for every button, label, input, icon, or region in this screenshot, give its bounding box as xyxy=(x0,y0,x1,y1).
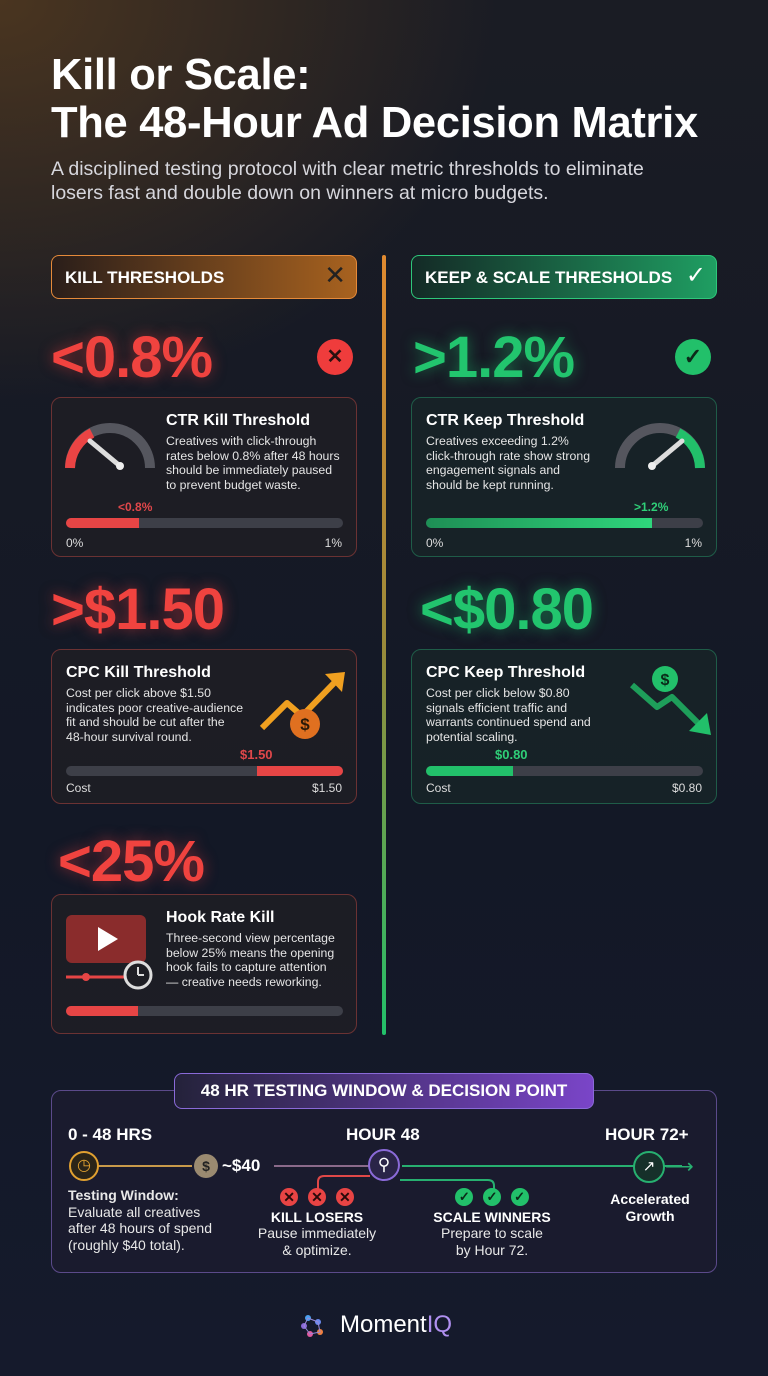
card: CTR kill: 0% xyxy=(66,536,83,550)
timeline title pill xyxy=(174,1073,594,1109)
card: CPC kill: indicates poor creative-audience xyxy=(66,700,243,714)
dollar marker xyxy=(194,1154,218,1178)
icon: check: ✓ xyxy=(686,262,706,289)
icon: trend up with dollar: $ xyxy=(300,715,310,734)
card: CTR keep: CTR Keep Threshold xyxy=(426,412,584,429)
card: CTR keep: Creatives exceeding 1.2% xyxy=(426,434,569,448)
kill losers: ✕ xyxy=(311,1189,323,1205)
keep header: KEEP & SCALE THRESHOLDS xyxy=(425,268,672,287)
icon: clock xyxy=(69,1151,99,1181)
divider xyxy=(382,255,386,1035)
card: CPC keep xyxy=(411,649,717,804)
kill losers: ✕ xyxy=(339,1189,351,1205)
big: <$0.80: <$0.80 xyxy=(420,577,593,642)
subtitle xyxy=(51,158,644,204)
panel: timeline: Accelerated xyxy=(610,1191,690,1207)
subtitle: losers fast and double down on winners at micro budgets. xyxy=(51,182,549,204)
icon: video player xyxy=(66,915,152,990)
card: CTR keep: click-through rate show strong xyxy=(426,448,590,462)
col 2: HOUR 48 xyxy=(346,1125,420,1144)
kill losers: & optimize. xyxy=(282,1242,352,1258)
card: CPC kill: Cost per click above $1.50 xyxy=(66,686,211,700)
icon: green check circle xyxy=(675,339,711,375)
icon: red x circle xyxy=(317,339,353,375)
panel: timeline: Evaluate all creatives xyxy=(68,1204,200,1220)
logo: MomentIQ xyxy=(340,1311,452,1338)
gauge xyxy=(615,423,705,470)
kill header: KILL THRESHOLDS xyxy=(65,268,224,287)
card: CPC kill: 48-hour survival round. xyxy=(66,730,192,744)
icon: clock: ◷ xyxy=(77,1157,91,1174)
card: CPC keep: Cost xyxy=(426,781,451,795)
kill losers: KILL LOSERS xyxy=(271,1209,363,1225)
big: >$1.50: >$1.50 xyxy=(51,577,224,642)
card: CPC keep: signals efficient traffic and xyxy=(426,700,567,714)
timeline title pill: 48 HR TESTING WINDOW & DECISION POINT xyxy=(201,1081,567,1100)
panel: timeline: Testing Window: xyxy=(68,1187,179,1203)
icon: trend down with dollar: $ xyxy=(661,672,670,689)
card: CTR kill: to prevent budget waste. xyxy=(166,478,301,492)
icon: trend up with dollar xyxy=(260,672,345,739)
kill header xyxy=(51,255,357,299)
subtitle: A disciplined testing protocol with clear metric thresholds to eliminate xyxy=(51,158,644,180)
card: CTR keep: engagement signals and xyxy=(426,463,560,477)
card: hook rate: — creative needs reworking. xyxy=(166,974,322,988)
icon: red x circle: ✕ xyxy=(327,346,343,368)
card: CPC kill: CPC Kill Threshold xyxy=(66,664,211,681)
big: <0.8%: <0.8% xyxy=(51,325,212,390)
card: CPC kill: fit and should be cut after the xyxy=(66,715,225,729)
icon: green check circle: ✓ xyxy=(684,344,702,369)
gauge xyxy=(65,423,155,470)
card: CTR kill: <0.8% xyxy=(118,500,152,514)
panel: timeline: after 48 hours of spend xyxy=(68,1220,212,1236)
card: CPC kill: $1.50 xyxy=(312,781,342,795)
icon: magnifier: ⚲ xyxy=(378,1155,390,1174)
big: >1.2%: >1.2% xyxy=(413,325,574,390)
card: hook rate: Hook Rate Kill xyxy=(166,909,274,926)
card: CPC kill: $1.50 xyxy=(240,747,273,762)
card: CTR keep: 1% xyxy=(685,536,702,550)
card: hook rate xyxy=(51,894,357,1034)
kill losers xyxy=(258,1188,376,1258)
card: CTR keep: >1.2% xyxy=(634,500,668,514)
branch lines xyxy=(317,1175,495,1188)
scale winners: ✓ xyxy=(514,1189,525,1204)
card: CPC kill xyxy=(51,649,357,804)
card: CPC keep: potential scaling. xyxy=(426,730,518,744)
card: CPC kill: Cost xyxy=(66,781,91,795)
card: hook rate: below 25% means the opening xyxy=(166,946,334,960)
card: hook rate: Three-second view percentage xyxy=(166,931,335,945)
col 1: 0 - 48 HRS xyxy=(68,1125,152,1144)
card: CPC keep: warrants continued spend and xyxy=(426,715,591,729)
scale winners: by Hour 72. xyxy=(456,1242,528,1258)
arrow: ⟶ xyxy=(665,1156,694,1178)
title: The 48-Hour Ad Decision Matrix xyxy=(51,99,698,147)
panel: timeline: (roughly $40 total). xyxy=(68,1236,185,1252)
card: CTR keep: 0% xyxy=(426,536,443,550)
scale winners: SCALE WINNERS xyxy=(433,1209,551,1225)
card: CPC keep: CPC Keep Threshold xyxy=(426,664,585,681)
keep header xyxy=(411,255,717,299)
icon: growth xyxy=(633,1151,665,1183)
card: CTR kill xyxy=(51,397,357,557)
card: CTR keep: should be kept running. xyxy=(426,478,554,492)
big: <25%: <25% xyxy=(58,829,204,894)
card: CTR kill: Creatives with click-through xyxy=(166,434,316,448)
scale winners: ✓ xyxy=(459,1189,470,1204)
icon: growth: ↗ xyxy=(643,1158,655,1175)
kill losers: ✕ xyxy=(283,1189,295,1205)
card: CPC keep: $0.80 xyxy=(672,781,702,795)
card: hook rate: hook fails to capture attention xyxy=(166,960,327,974)
title: Kill or Scale: xyxy=(51,51,310,99)
card: CTR kill: rates below 0.8% after 48 hours xyxy=(166,448,340,462)
scale winners: Prepare to scale xyxy=(441,1225,543,1241)
icon: magnifier xyxy=(368,1149,400,1181)
card: CTR kill: CTR Kill Threshold xyxy=(166,412,310,429)
panel: timeline: Growth xyxy=(626,1208,674,1224)
kill losers: Pause immediately xyxy=(258,1225,376,1241)
card: CTR kill: should be immediately paused xyxy=(166,463,332,477)
card: CTR kill: 1% xyxy=(325,536,342,550)
title xyxy=(51,51,698,147)
timeline lines xyxy=(84,1165,192,1167)
panel: timeline xyxy=(51,1090,717,1273)
card: CPC keep: Cost per click below $0.80 xyxy=(426,686,570,700)
col 3: HOUR 72+ xyxy=(605,1125,689,1144)
panel: timeline: ~$40 xyxy=(222,1156,260,1175)
icon: trend down with dollar xyxy=(630,666,711,735)
card: CTR keep xyxy=(411,397,717,557)
dollar marker: $ xyxy=(202,1158,210,1174)
card: CPC keep: $0.80 xyxy=(495,747,528,762)
icon: brain xyxy=(301,1315,323,1337)
scale winners: ✓ xyxy=(487,1189,497,1204)
scale winners xyxy=(433,1188,551,1258)
icon: x: ✕ xyxy=(324,260,346,290)
